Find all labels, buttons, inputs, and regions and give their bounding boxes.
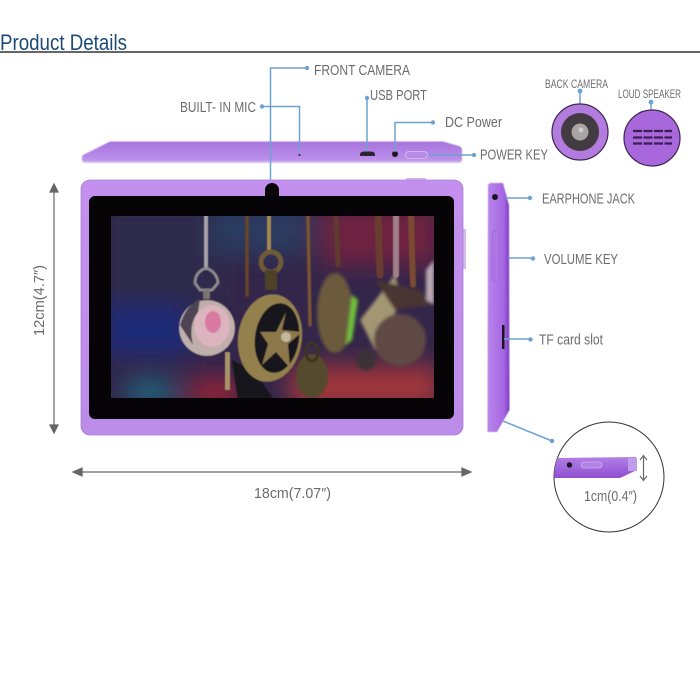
screen photo: pocket watches: [111, 216, 434, 398]
loud speaker detail: [618, 89, 681, 166]
zoomed edge: [554, 457, 637, 478]
title: Product Details: [0, 30, 127, 55]
tablet volume key edge: [463, 229, 466, 269]
icon: USB port: [360, 152, 375, 156]
callout: front camera: [270, 62, 410, 180]
callout: zoom pointer: [503, 421, 554, 443]
tablet front view: [81, 178, 466, 435]
title rule: [0, 51, 700, 53]
tablet bezel: [89, 196, 454, 419]
tablet top edge view: [82, 142, 462, 163]
callout: DC power: [395, 114, 502, 152]
tablet body: [81, 180, 463, 435]
callout: volume key: [508, 251, 618, 268]
callout: TF card slot: TF card slot: [539, 332, 604, 348]
width label: 18cm(7.07″): [254, 485, 331, 502]
callout: power key: POWER KEY: [480, 146, 548, 164]
icon: built-in mic hole: [298, 154, 300, 156]
icon: front camera notch: [265, 183, 279, 196]
icon: key: [581, 462, 602, 468]
zoom circle: thickness detail: [554, 422, 664, 532]
callout: earphone jack: [505, 190, 635, 208]
left silver watch: [179, 268, 235, 390]
right blurred watches: [317, 260, 434, 370]
back camera detail: [545, 79, 608, 160]
icon: TF card slot: [502, 325, 504, 349]
callout: earphone jack: EARPHONE JACK: [542, 190, 635, 208]
height dimension arrow: [50, 184, 58, 433]
tablet power key edge: [406, 178, 426, 181]
callout: USB port: USB PORT: [370, 87, 427, 104]
back camera label: BACK CAMERA: [545, 79, 608, 91]
callout: built-in mic: BUILT- IN MIC: [180, 99, 256, 116]
height label: 12cm(4.7″): [31, 265, 48, 336]
callout: power key: [428, 146, 548, 164]
center bronze watch: [232, 252, 328, 400]
thickness label: 1cm(0.4″): [584, 488, 637, 505]
icon: earphone jack: [492, 194, 498, 200]
callout: USB port: [365, 87, 427, 151]
thickness arrow: [640, 456, 647, 480]
callout: built-in mic: [180, 99, 300, 152]
hanging chains: [206, 216, 413, 325]
icon: power key: [406, 152, 428, 158]
callout: volume key: VOLUME KEY: [544, 251, 618, 268]
icon: DC power jack: [392, 151, 398, 157]
tablet side view: [488, 183, 510, 432]
callout: front camera: FRONT CAMERA: [314, 62, 410, 79]
icon: jack: [567, 462, 572, 468]
icon: volume key: [492, 231, 499, 282]
callout: DC power: DC Power: [445, 114, 502, 131]
callout: TF card slot: [504, 332, 604, 348]
width dimension arrow: [73, 468, 471, 476]
